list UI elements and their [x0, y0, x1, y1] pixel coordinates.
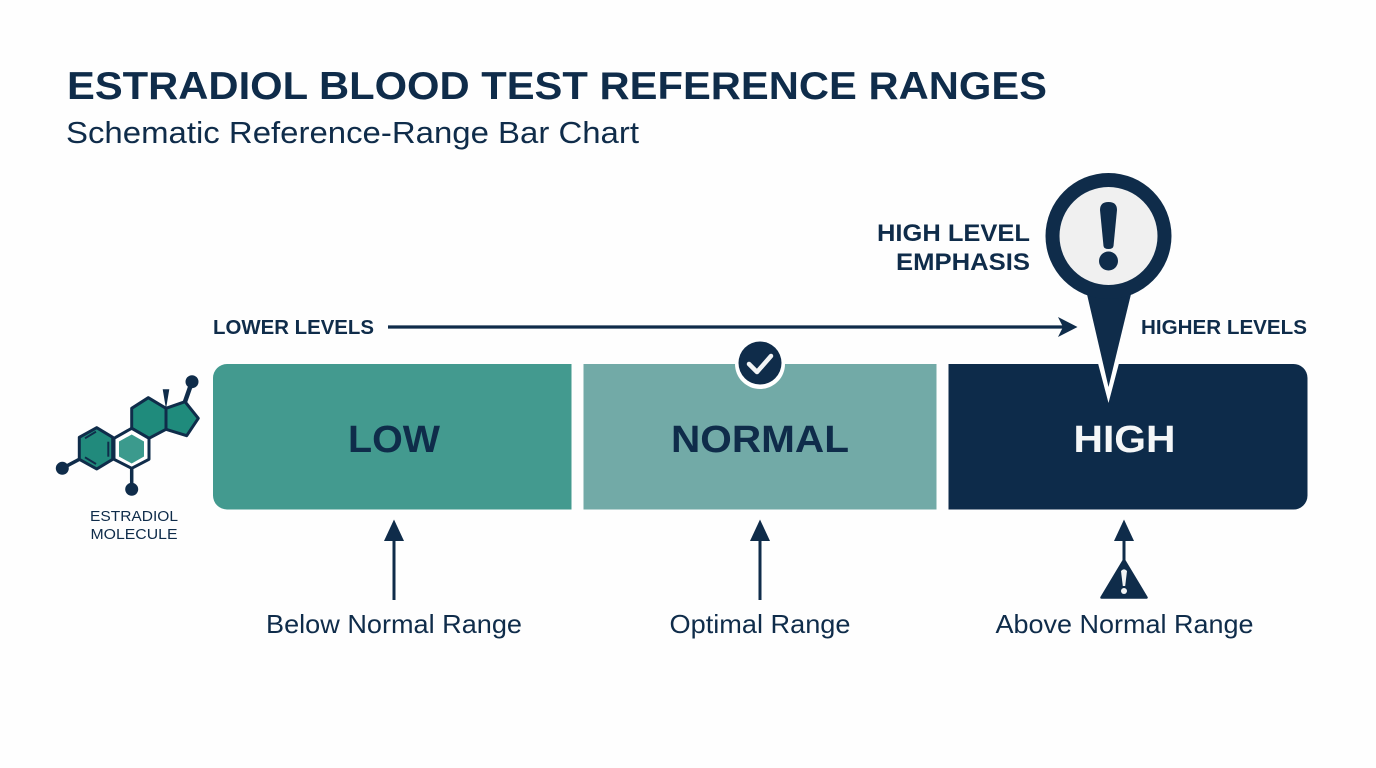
arrow: normal [750, 520, 770, 600]
callout label: high level emphasis [877, 220, 1030, 276]
caption: below normal range: Below Normal Range [266, 609, 522, 639]
molecule label [90, 509, 178, 543]
callout label: high level emphasis: HIGH LEVEL [877, 220, 1030, 247]
title: ESTRADIOL BLOOD TEST REFERENCE RANGES [67, 65, 1047, 108]
bar: low: LOW [348, 419, 440, 461]
caption: optimal range: Optimal Range [670, 609, 850, 639]
arrow: lower to higher [388, 317, 1078, 337]
lower levels label: LOWER LEVELS [213, 317, 374, 339]
arrow: low [384, 520, 404, 600]
icon: check badge [735, 339, 785, 389]
callout label: high level emphasis: EMPHASIS [896, 249, 1030, 276]
icon: warning triangle [1102, 560, 1146, 598]
caption: above normal range: Above Normal Range [996, 609, 1254, 639]
higher levels label: HIGHER LEVELS [1141, 317, 1307, 339]
molecule label: ESTRADIOL [90, 509, 178, 525]
molecule label: MOLECULE [90, 527, 178, 543]
bar: low [213, 364, 572, 510]
subtitle: Schematic Reference-Range Bar Chart [66, 115, 639, 150]
arrow: high [1114, 520, 1134, 565]
icon: high level pin [1046, 173, 1172, 403]
bar: normal: NORMAL [671, 419, 849, 461]
bar: normal [584, 364, 936, 510]
bar: high: HIGH [1074, 419, 1176, 461]
bar: high [948, 364, 1308, 510]
icon: estradiol molecule [56, 375, 198, 496]
